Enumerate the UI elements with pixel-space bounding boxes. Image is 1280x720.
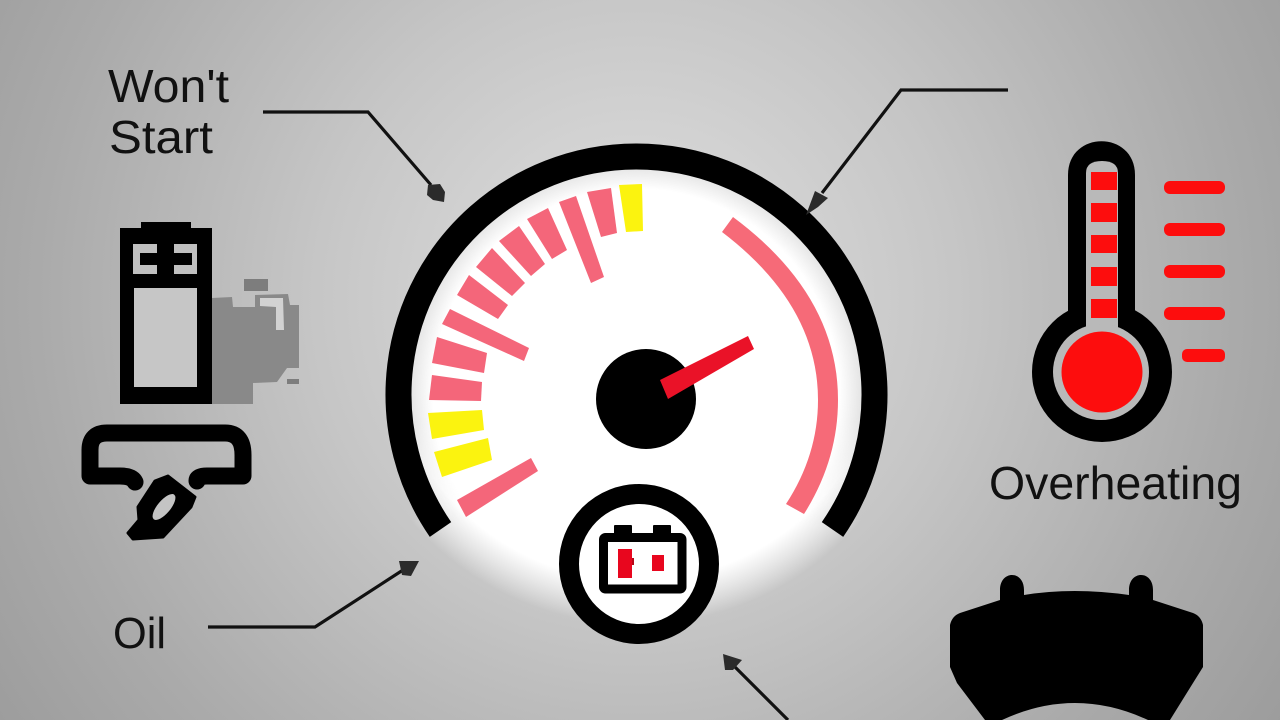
gauge — [385, 144, 888, 612]
label: Oil: Oil — [113, 609, 166, 658]
label: Overheating: Overheating — [989, 457, 1242, 509]
gauge hub — [596, 349, 696, 449]
icon: thermometer — [1032, 141, 1172, 442]
temperature scale lines — [1164, 181, 1225, 362]
label: Won't Start: Start — [109, 111, 213, 163]
right red zone arc — [722, 217, 838, 514]
icon: battery warning badge — [569, 494, 709, 634]
left tick marks — [429, 188, 617, 517]
gauge inner shading ring — [412, 170, 862, 484]
label: Won't Start — [108, 60, 229, 163]
leader arrow: Won't Start — [263, 112, 445, 202]
leader arrow: bottom — [723, 654, 788, 720]
gauge outer arc — [399, 156, 874, 530]
leader arrow: top right — [806, 90, 1008, 215]
label: Won't Start: Won't — [108, 60, 229, 112]
icon: brake pad — [950, 575, 1203, 720]
gauge face glow — [414, 170, 859, 612]
icon: battery — [120, 222, 212, 404]
yellow tick marks — [428, 184, 643, 477]
gauge needle — [660, 336, 754, 399]
icon: oil can — [90, 433, 243, 539]
icon: engine — [212, 279, 299, 404]
leader arrow: Oil — [208, 561, 419, 627]
